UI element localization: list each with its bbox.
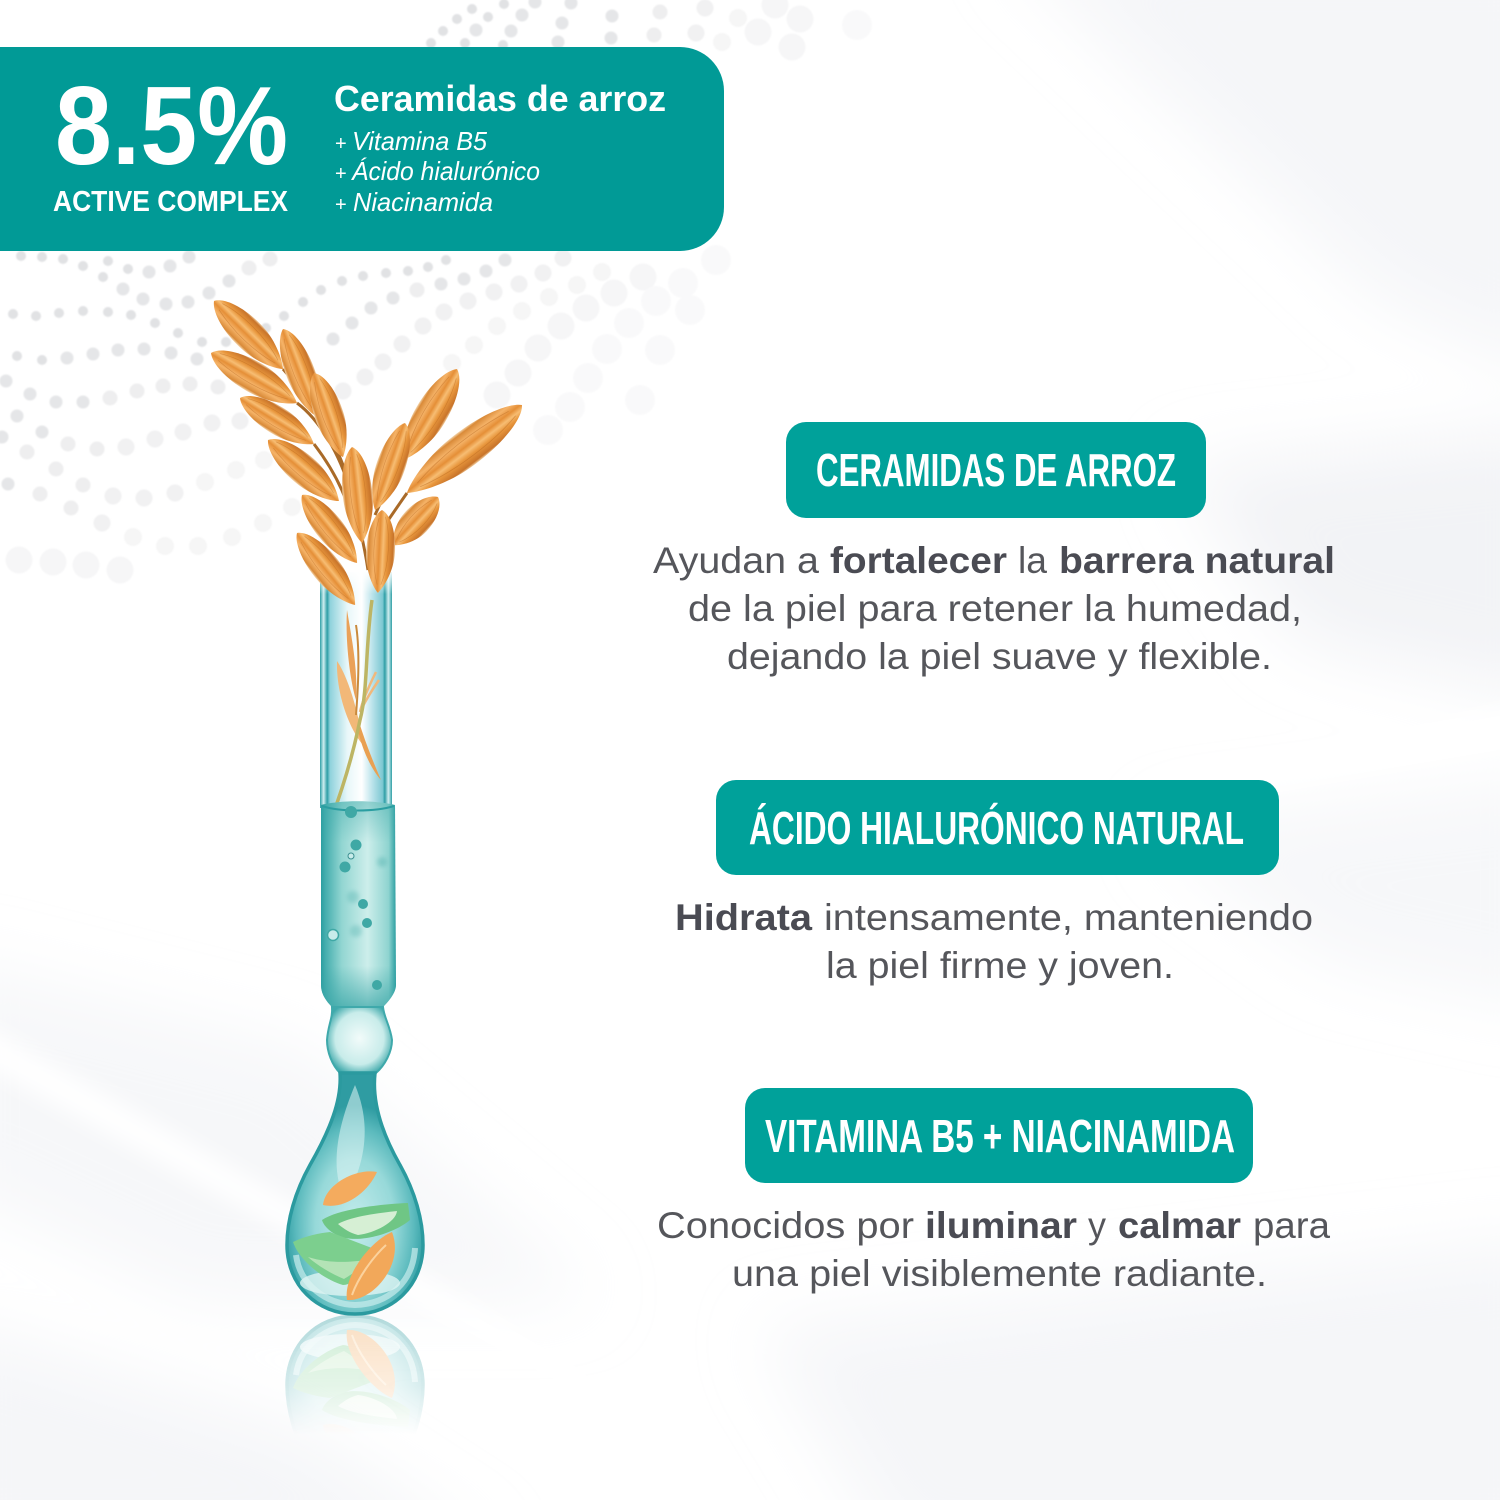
body text: para [1253, 1205, 1330, 1246]
body text [657, 1205, 1330, 1294]
body text: y [1088, 1205, 1106, 1246]
banner heading: Ceramidas de arroz [334, 78, 666, 119]
body text: intensamente, manteniendo [824, 897, 1313, 938]
banner ingredient list: + [335, 163, 347, 185]
drop reflection [285, 1315, 425, 1425]
banner ingredient list [335, 126, 540, 217]
body text: Hidrata [675, 897, 812, 938]
body text [675, 897, 1313, 986]
label: active complex: ACTIVE COMPLEX [53, 186, 289, 218]
body text [653, 540, 1335, 677]
rice stems [283, 369, 407, 570]
section: vitamina b5 + niacinamida [657, 1088, 1330, 1294]
body text: dejando la piel suave y flexible. [727, 636, 1272, 677]
body text: Ayudan a [653, 540, 819, 581]
banner ingredient list: Niacinamida [353, 187, 493, 217]
glass tube [320, 572, 392, 808]
banner ingredient list: Ácido hialurónico [350, 156, 540, 186]
water drop with aloe and rice [287, 1073, 423, 1314]
stat: 8.5%: 8.5% [55, 64, 288, 188]
rice grains [204, 289, 533, 614]
banner ingredient list: Vitamina B5 [352, 126, 488, 156]
banner ingredient list: + [335, 194, 347, 216]
pill heading [786, 422, 1206, 518]
pill heading: VITAMINA B5 + NIACINAMIDA [765, 1110, 1235, 1162]
section: acido hialuronico natural [675, 780, 1313, 986]
illustration: rice in dropper [211, 300, 522, 1425]
stem and small leaves in tube [337, 600, 381, 803]
pill heading [745, 1088, 1253, 1183]
liquid column [321, 801, 396, 1007]
pill heading: CERAMIDAS DE ARROZ [816, 444, 1176, 496]
body text: fortalecer [830, 540, 1007, 581]
pill heading: ÁCIDO HIALURÓNICO NATURAL [749, 802, 1244, 854]
section: ceramidas de arroz [653, 422, 1335, 677]
body text: calmar [1118, 1205, 1241, 1246]
body text: una piel visiblemente radiante. [732, 1253, 1267, 1294]
body text: Conocidos por [657, 1205, 914, 1246]
body text: la [1018, 540, 1047, 581]
body text: iluminar [925, 1205, 1077, 1246]
dotted halftone pattern [2, 2, 857, 570]
body text: la piel firme y joven. [826, 945, 1174, 986]
dropper neck bulb [327, 1007, 392, 1077]
banner ingredient list: + [335, 133, 347, 155]
banner: 8.5% active complex [0, 47, 724, 251]
pill heading [716, 780, 1279, 875]
body text: de la piel para retener la humedad, [688, 588, 1302, 629]
bubbles [328, 806, 387, 1062]
body text: barrera natural [1059, 540, 1335, 581]
